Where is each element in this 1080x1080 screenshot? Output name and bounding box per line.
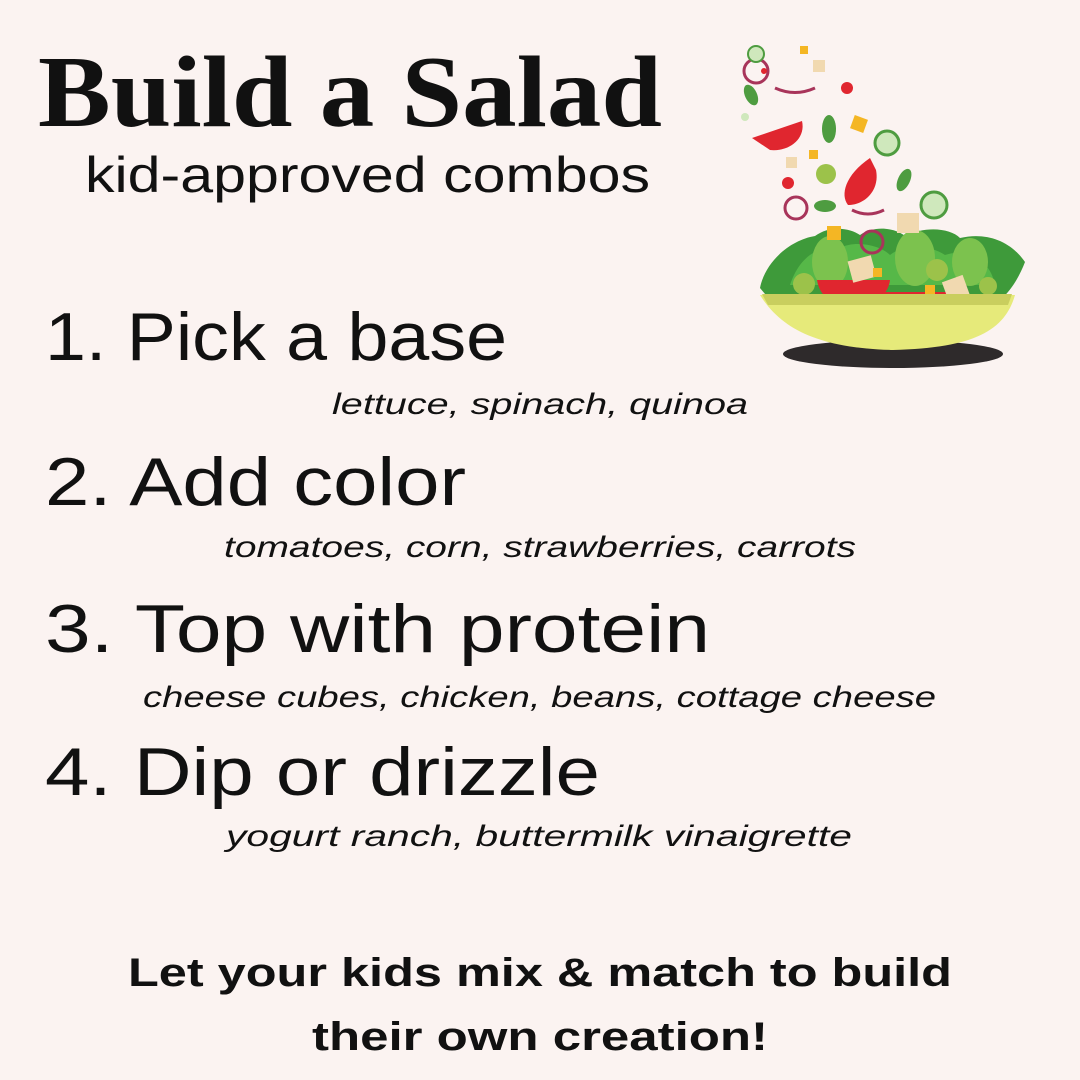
step 2: tomatoes, corn, strawberries, carrots bbox=[224, 531, 856, 564]
bowl bbox=[760, 295, 1015, 350]
step 1: 1. Pick a base bbox=[45, 299, 507, 375]
footer message bbox=[128, 951, 952, 1059]
step 1: lettuce, spinach, quinoa bbox=[332, 388, 748, 421]
title: Build a Salad bbox=[38, 36, 662, 149]
step 4 bbox=[45, 734, 852, 853]
subtitle: kid-approved combos bbox=[85, 147, 650, 203]
step 2: 2. Add color bbox=[45, 444, 466, 520]
step 2 bbox=[45, 444, 856, 564]
step 3 bbox=[45, 591, 936, 714]
step 3: cheese cubes, chicken, beans, cottage cheese bbox=[143, 681, 936, 714]
lettuce leaves bbox=[760, 229, 1025, 306]
footer message: Let your kids mix & match to build bbox=[128, 951, 952, 995]
step 1 bbox=[45, 299, 748, 421]
salad bowl illustration bbox=[741, 46, 1025, 368]
falling ingredients bbox=[741, 46, 947, 253]
footer message: their own creation! bbox=[312, 1015, 768, 1059]
step 3: 3. Top with protein bbox=[45, 591, 710, 667]
bowl shadow bbox=[783, 340, 1003, 368]
step 4: yogurt ranch, buttermilk vinaigrette bbox=[223, 820, 852, 853]
step 4: 4. Dip or drizzle bbox=[45, 734, 600, 810]
